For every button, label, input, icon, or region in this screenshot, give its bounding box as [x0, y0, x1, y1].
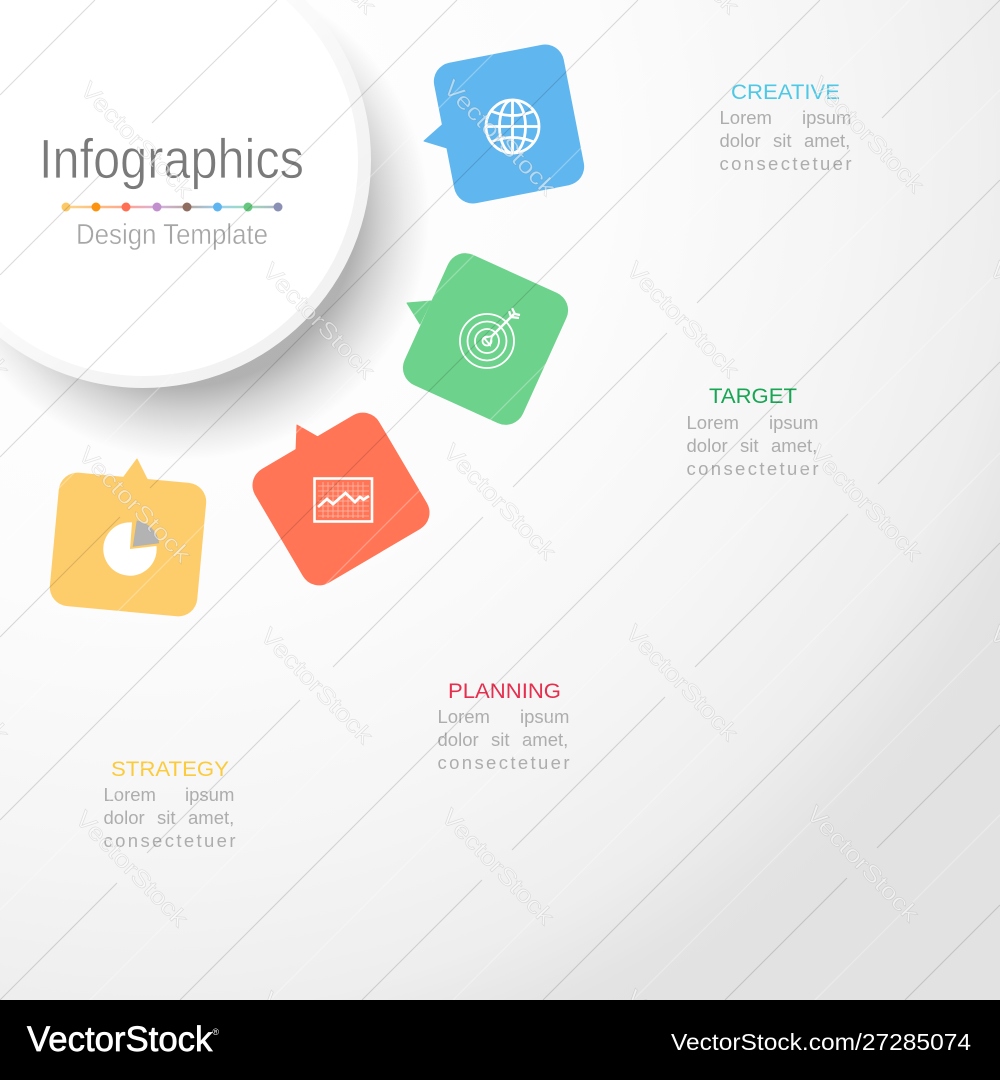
- text block: planning: ipsum: [520, 706, 569, 727]
- title: Infographics: [39, 127, 304, 190]
- text block: target: ipsum: [769, 412, 818, 433]
- footer bar: [0, 1000, 1000, 1080]
- text block: planning: dolor: [438, 729, 479, 750]
- watermarks: VectorStock: [255, 622, 379, 749]
- text block: creative: amet,: [804, 130, 850, 151]
- watermarks: VectorStock: [621, 256, 745, 383]
- panel: planning speech bubble: [245, 406, 437, 592]
- watermarks: VectorStock: [75, 76, 199, 203]
- text block: target: Lorem: [686, 412, 739, 433]
- watermarks: VectorStock: [804, 439, 928, 566]
- heading: planning: PLANNING: [448, 679, 561, 703]
- text block: strategy: ipsum: [185, 784, 234, 805]
- text block: target: [686, 412, 818, 479]
- heading: strategy: STRATEGY: [111, 757, 229, 781]
- watermarks: VectorStock: [257, 257, 381, 384]
- watermarks: VectorStock: [73, 441, 197, 568]
- watermarks: VectorStock: [438, 74, 562, 201]
- text block: strategy: Lorem: [104, 784, 156, 805]
- watermarks: VectorStock: [436, 803, 560, 930]
- text block: target: dolor: [686, 435, 728, 456]
- text block: creative: sit: [773, 130, 792, 151]
- text block: strategy: [104, 784, 236, 851]
- icon: target with arrow: [460, 308, 520, 368]
- text block: planning: amet,: [522, 729, 568, 750]
- text block: planning: sit: [491, 729, 510, 750]
- text block: planning: consectetuer: [438, 752, 570, 773]
- circle shadow: [0, 0, 430, 460]
- text block: creative: consectetuer: [720, 153, 852, 174]
- panel: target speech bubble: [397, 247, 574, 431]
- watermarks: VectorStock: [70, 805, 194, 932]
- icon: line chart: [314, 478, 372, 522]
- text block: target: sit: [740, 435, 758, 456]
- watermarks: VectorStock: [620, 619, 744, 746]
- text block: strategy: amet,: [188, 807, 234, 828]
- text block: strategy: consectetuer: [104, 830, 236, 851]
- subtitle: Design Template: [76, 219, 268, 251]
- text block: creative: [720, 107, 852, 174]
- panel: creative speech bubble: [424, 41, 587, 207]
- footer brand: ®: [212, 1027, 219, 1037]
- panel: title circle: [0, 0, 371, 388]
- text block: creative: ipsum: [802, 107, 851, 128]
- text block: creative: Lorem: [720, 107, 772, 128]
- watermarks: VectorStock: [806, 71, 930, 198]
- text block: planning: Lorem: [438, 706, 490, 727]
- footer url: VectorStock.com/27285074: [671, 1029, 971, 1055]
- icon: pie chart: [103, 520, 159, 576]
- text block: strategy: dolor: [104, 807, 145, 828]
- text block: target: amet,: [771, 435, 817, 456]
- heading: creative: CREATIVE: [731, 80, 840, 104]
- text block: strategy: sit: [157, 807, 176, 828]
- watermarks: VectorStock: [438, 438, 562, 565]
- text block: creative: dolor: [720, 130, 761, 151]
- icon: globe: [486, 100, 539, 153]
- watermarks: VectorStock: [801, 800, 925, 927]
- text block: planning: [438, 706, 570, 773]
- text block: target: consectetuer: [686, 458, 818, 479]
- panel: strategy speech bubble: [48, 459, 208, 618]
- footer brand: VectorStock: [27, 1020, 214, 1059]
- timeline of coloured dots: [62, 202, 282, 212]
- heading: target: TARGET: [709, 384, 797, 408]
